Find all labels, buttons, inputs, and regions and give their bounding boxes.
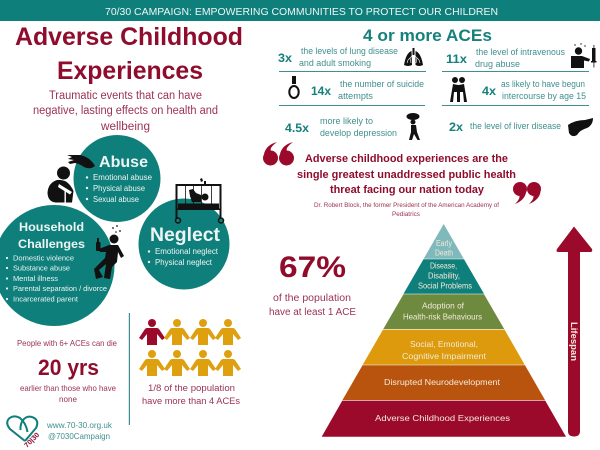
stat: liver disease: 2x bbox=[449, 120, 463, 134]
icon: noose bbox=[289, 76, 299, 98]
stat: depression: 4.5x bbox=[285, 121, 309, 135]
stat: lung disease bbox=[278, 46, 398, 68]
subtitle text: negative, lasting effects on health and bbox=[33, 105, 218, 117]
pyramid chart bbox=[322, 224, 566, 437]
tier: early death: Death bbox=[435, 248, 453, 258]
panel: household challenges circle: Substance abuse bbox=[13, 264, 70, 272]
panel: abuse circle: Emotional abuse bbox=[93, 173, 153, 182]
panel: abuse circle: Physical abuse bbox=[93, 184, 146, 193]
tier: disrupted neurodevelopment: Disrupted Neurodevelopment bbox=[384, 377, 501, 387]
tier: disease, disability, social problems: Disease, bbox=[430, 260, 457, 270]
icon: drunk person with bottle bbox=[94, 225, 124, 279]
icon: opening quote mark bbox=[263, 142, 294, 166]
tier: disease, disability, social problems: Social Problems bbox=[418, 280, 472, 290]
contact details bbox=[46, 420, 113, 441]
quote text: single greatest unaddressed public health bbox=[297, 169, 516, 181]
panel: neglect circle: Physical neglect bbox=[155, 258, 213, 267]
arrow: lifespan: Lifespan bbox=[569, 322, 579, 361]
tier: disrupted neurodevelopment bbox=[342, 365, 545, 400]
contact details: @7030Campaign bbox=[48, 431, 110, 441]
stat: suicide attempts: attempts bbox=[338, 91, 374, 101]
stat: suicide attempts bbox=[311, 79, 424, 101]
subtitle text bbox=[33, 90, 218, 133]
icon: person under rain cloud bbox=[406, 113, 420, 140]
stat: depression: more likely to bbox=[320, 116, 373, 126]
tier: early death bbox=[424, 224, 464, 259]
subtitle text: Traumatic events that can have bbox=[49, 90, 202, 102]
title: Experiences bbox=[57, 57, 203, 85]
panel: household challenges circle: Challenges bbox=[18, 237, 85, 251]
stat: depression: develop depression bbox=[320, 128, 397, 138]
icon: crib with baby bbox=[176, 178, 224, 223]
icon: liver bbox=[568, 118, 593, 136]
caption: 1/8 of the population: 1/8 of the population bbox=[148, 383, 235, 394]
stat: life expectancy: 20 yrs bbox=[38, 355, 99, 380]
tier: adverse childhood experiences: Adverse Childhood Experiences bbox=[375, 413, 510, 423]
panel: abuse circle bbox=[74, 135, 160, 222]
quote attribution: Pediatrics bbox=[392, 212, 420, 218]
stat: 67 percent: of the population bbox=[273, 293, 351, 304]
tier: early death: Early bbox=[436, 238, 453, 248]
heading: 4 or more ACEs: 4 or more ACEs bbox=[363, 26, 492, 45]
stat: life expectancy: People with 6+ ACEs can die bbox=[17, 338, 117, 348]
stat: lung disease: 3x bbox=[278, 51, 292, 65]
quote text bbox=[297, 153, 516, 196]
icon: couple bbox=[450, 77, 467, 102]
stat: intravenous drug abuse: drug abuse bbox=[475, 59, 520, 69]
stat: lung disease: and adult smoking bbox=[299, 58, 371, 68]
tier: social, emotional, cognitive impairment: Cognitive Impairment bbox=[402, 351, 487, 361]
icon: closing quote mark bbox=[513, 182, 541, 204]
tier: disease, disability, social problems bbox=[404, 259, 484, 294]
stat: early intercourse bbox=[482, 79, 586, 101]
panel: household challenges circle: Household bbox=[19, 220, 84, 234]
panel: neglect circle bbox=[138, 198, 230, 290]
icon: lungs bbox=[404, 48, 423, 66]
logo: 70/30 hearts bbox=[7, 416, 41, 449]
icon: person with syringe bbox=[571, 43, 596, 68]
panel: household challenges circle: Mental illness bbox=[13, 274, 58, 283]
tier: health-risk behaviours: Health-risk Behaviours bbox=[403, 312, 482, 322]
quote attribution: Dr. Robert Block, the former President of the American Academy of bbox=[314, 203, 499, 209]
panel: household challenges circle: Incarcerated parent bbox=[13, 294, 79, 304]
stat: liver disease: the level of liver disease bbox=[470, 121, 561, 131]
stat: intravenous drug abuse bbox=[446, 47, 565, 69]
stat: early intercourse: 4x bbox=[482, 84, 496, 98]
contact details: www.70-30.org.uk bbox=[46, 420, 113, 430]
panel: neglect circle: Neglect bbox=[150, 225, 221, 246]
icon: hand reaching bbox=[67, 155, 95, 168]
panel: household challenges circle: Parental separation / divorce bbox=[13, 284, 107, 293]
stat: 67 percent bbox=[269, 251, 356, 318]
stat: intravenous drug abuse: 11x bbox=[446, 52, 467, 66]
tier: disease, disability, social problems: Disability, bbox=[428, 270, 460, 280]
arrow: lifespan bbox=[556, 226, 592, 436]
people pictogram: 1 in 8 bbox=[139, 319, 241, 376]
caption: 1/8 of the population: have more than 4 ACEs bbox=[142, 396, 240, 407]
panel: abuse circle: Sexual abuse bbox=[93, 195, 140, 204]
logo: 70/30 hearts: 70|30 bbox=[23, 432, 41, 449]
stat: liver disease bbox=[449, 120, 561, 134]
panel: household challenges circle: Domestic violence bbox=[13, 254, 74, 262]
caption: 1/8 of the population bbox=[142, 383, 240, 407]
tier: social, emotional, cognitive impairment: Social, Emotional, bbox=[410, 339, 478, 349]
quote text: Adverse childhood experiences are the bbox=[305, 153, 508, 165]
header banner: 70/30 CAMPAIGN: EMPOWERING COMMUNITIES TO PROTECT OUR CHILDREN bbox=[105, 6, 498, 18]
stat: early intercourse: as likely to have begun bbox=[501, 79, 585, 89]
title: Adverse Childhood bbox=[15, 23, 243, 51]
stat: 67 percent: have at least 1 ACE bbox=[269, 307, 356, 318]
stat: depression bbox=[285, 116, 397, 138]
stat: life expectancy bbox=[17, 338, 117, 404]
panel: abuse circle: Abuse bbox=[99, 154, 148, 171]
panel: household challenges circle bbox=[0, 205, 114, 326]
subtitle text: wellbeing bbox=[100, 121, 150, 133]
stat: life expectancy: earlier than those who have bbox=[20, 383, 116, 393]
tier: adverse childhood experiences bbox=[322, 401, 566, 437]
icon: crouching child bbox=[48, 166, 74, 203]
tier: health-risk behaviours bbox=[383, 294, 504, 329]
stat: lung disease: the levels of lung disease bbox=[301, 46, 398, 56]
stat: suicide attempts: 14x bbox=[311, 84, 331, 98]
tier: social, emotional, cognitive impairment bbox=[363, 330, 525, 365]
quote text: threat facing our nation today bbox=[330, 184, 485, 196]
stat: suicide attempts: the number of suicide bbox=[340, 79, 424, 89]
panel: neglect circle: Emotional neglect bbox=[155, 247, 219, 256]
header banner bbox=[0, 0, 600, 21]
stat: life expectancy: none bbox=[59, 394, 77, 404]
stat: early intercourse: intercourse by age 15 bbox=[502, 91, 586, 101]
title bbox=[15, 23, 243, 85]
tier: health-risk behaviours: Adoption of bbox=[422, 300, 465, 310]
stat: intravenous drug abuse: the level of intravenous bbox=[476, 47, 565, 57]
stat: 67 percent: 67% bbox=[279, 251, 346, 284]
quote attribution bbox=[314, 203, 499, 218]
